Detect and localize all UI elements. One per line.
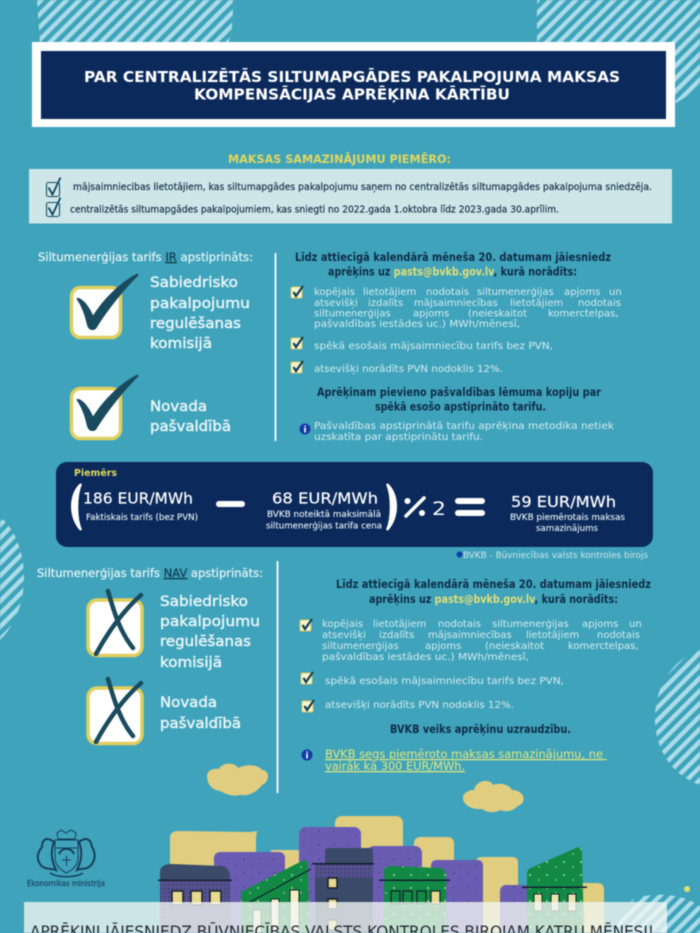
decorative dot [684,886,690,892]
divisor: 2 [432,498,446,520]
panel: bottom banner [24,902,667,933]
icon: check [46,178,60,196]
title banner [32,42,675,127]
bullet: volume text: lietotājiem [373,619,426,630]
icon: small check [300,619,312,631]
label: Sabiedrisko pakalpojumu regulēšanas komisijā: Sabiedrisko [150,275,238,291]
title: PAR CENTRALIZĒTĀS SILTUMAPGĀDES PAKALPOJUMA MAKSAS [84,66,620,86]
label: Sabiedrisko pakalpojumu regulēšanas komisijā: Sabiedrisko [160,594,248,610]
label: Sabiedrisko pakalpojumu regulēšanas komisijā: regulēšanas [160,634,251,650]
icon: info: i [305,752,309,762]
label: Sabiedrisko pakalpojumu regulēšanas komisijā: komisijā [160,655,222,671]
icon: small check [291,286,303,298]
example label: Piemērs [74,468,117,479]
icon: small check [302,700,314,712]
illustration: clouds [207,764,524,812]
divider [276,561,278,793]
icon: large check 2 [72,376,137,438]
label: Novada pašvaldībā: pašvaldībā [160,716,241,732]
caption: maximum price: siltumenerģijas tarifa cena [266,522,382,532]
icon: large cross 2 [88,679,142,744]
info text: uzskatīta par apstiprinātu tarifu. [314,432,483,443]
panel: example formula [56,462,653,547]
bullet: volume text: nodotais [438,619,481,630]
decorative striped circle: left [0,517,24,640]
bullet: VAT text: atsevišķi norādīts PVN nodoklis 12%. [325,699,514,711]
divider [274,253,276,441]
bullet: volume text: mājsaimniecības [414,298,498,309]
label: Sabiedrisko pakalpojumu regulēšanas komisijā: regulēšanas [150,316,241,332]
bullet: volume text: (neieskaitot [468,308,527,320]
division sign [404,498,425,516]
bullet: volume text: nodotais [597,630,640,641]
bullet: volume text: apjoms [413,308,449,320]
heading: maksas samazinājumu piemēro: MAKSAS SAMAZINĀJUMU PIEMĒRO: [228,152,451,166]
bullet: volume text: apjoms [564,287,600,298]
icon: small check [301,672,313,684]
bullet: volume text: atsevišķi [322,629,366,641]
logo: coat of arms [38,830,95,877]
label: Novada pašvaldībā: Novada [160,695,217,711]
icon: large cross 1 [88,591,142,656]
right bracket [387,484,396,530]
bullet: volume text: apjoms [425,641,461,652]
bullet: tariff text: spēkā esošais mājsaimniecību tarifs bez PVN, [325,675,564,687]
bullet: volume text: komerctelpas, [568,641,639,652]
bullet: volume text: izdalīts [379,630,414,641]
icon: small check [291,337,303,349]
instructions heading (approved tariff): Līdz attiecīgā kalendārā mēneša 20. datumam jāiesniedz [295,250,611,264]
footnote: BVKB: BVKB - Būvniecības valsts kontroles birojs [463,551,648,561]
label: Sabiedrisko pakalpojumu regulēšanas komisijā: pakalpojumu [160,614,260,630]
bullet: volume text: izdalīts [368,298,403,309]
note: attach decision copy: spēkā esošo apstiprināto tarifu. [375,400,546,414]
highlighted note: limit: vairāk kā 300 EUR/MWh. [325,759,465,773]
caption: applied reduction: BVKB piemērotais maksas [510,513,626,523]
value: actual tariff: 186 EUR/MWh [83,490,193,508]
icon: info [300,424,310,436]
illustration: city buildings [158,816,604,933]
bullet: volume text: kopējais [314,287,355,298]
section heading: tarifs NAV apstiprināts: Siltumenerģijas tarifs NAV apstiprināts: [37,566,263,580]
decorative striped circle: bottom right [612,895,700,933]
bullet: volume text: (neieskaitot [485,641,544,652]
label: Sabiedrisko pakalpojumu regulēšanas komisijā: pakalpojumu [150,296,250,312]
icon: check [46,198,60,216]
instructions heading (no approved tariff): Līdz attiecīgā kalendārā mēneša 20. datumam jāiesniedz [336,577,651,591]
logo caption: Ekonomikas ministrija [27,879,105,888]
bullet: volume text: lietotājiem [510,298,563,309]
bullet: volume text: siltumenerģijas [314,308,391,320]
minus sign [216,501,245,507]
decorative striped circle: top right [537,0,700,103]
bullet: volume text: pašvaldības iestādes uc.) MWh/mēnesī, [322,651,529,663]
bullet: volume text: nodotais [426,287,469,298]
caption: actual tariff: Faktiskais tarifs (bez PVN) [86,513,198,523]
decorative striped circle: top left [37,0,233,44]
caption: applied reduction: samazinājums [536,524,599,534]
bullet: volume text: lietotājiem [363,287,416,298]
icon: info [302,750,312,762]
info text: Pašvaldības apstiprinātā tarifu aprēķina metodika netiek [314,420,614,432]
bullet: volume text: pašvaldības iestādes uc.) MWh/mēnesī, [314,318,520,330]
value: maximum price: 68 EUR/MWh [272,490,378,508]
value: applied reduction: 59 EUR/MWh [511,493,616,511]
bullet: volume text: siltumenerģijas [322,641,399,652]
bullet: volume text: komerctelpas, [548,308,619,320]
equals sign [455,498,485,516]
bullet: volume text: un [629,619,642,630]
note: supervision: BVKB veiks aprēķinu uzraudzību. [390,722,571,736]
bullet: volume text: nodotais [578,298,621,309]
icon: small check [291,361,303,373]
title: KOMPENSĀCIJAS APRĒĶINA KĀRTĪBU [194,84,510,104]
highlighted note: limit: BVKB segs piemēroto maksas samazinājumu, ne [325,747,603,761]
bullet: volume text: atsevišķi [314,297,358,309]
panel: applicability [29,169,672,224]
applicability text 2: centralizētās siltumapgādes pakalpojumiem, kas sniegti no 2022.gada 1.oktobra līdz 2023.gada 30.aprīlim. [70,204,559,216]
bullet: VAT text: atsevišķi norādīts PVN nodoklis 12%. [314,363,503,375]
label: Novada pašvaldībā: Novada [150,399,207,415]
instructions heading (approved tariff): aprēķins uz pasts@bvkb.gov.lv, kurā norādīts: [328,264,594,278]
bullet: volume text: siltumenerģijas [492,619,569,630]
bullet: volume text: lietotājiem [526,630,579,641]
bullet: volume text: siltumenerģijas [477,287,554,298]
bullet: volume text: kopējais [322,619,363,630]
instructions heading (no approved tariff): aprēķins uz pasts@bvkb.gov.lv, kurā norādīts: [369,592,635,606]
applicability text 1: mājsaimniecibas lietotājiem, kas siltumapgādes pakalpojumu saņem no centralizētās siltumapgādes pakalpojuma sniedzēja. [73,182,652,193]
decorative striped circle: right [655,650,700,785]
label: Novada pašvaldībā: pašvaldībā [150,419,231,435]
label: Sabiedrisko pakalpojumu regulēšanas komisijā: komisijā [150,336,212,352]
bullet: volume text: apjoms [582,619,618,630]
note: attach decision copy: Aprēķinam pievieno pašvaldības lēmuma kopiju par [317,385,601,399]
caption: maximum price: BVKB noteiktā maksimālā [267,510,381,520]
section heading: tarifs IR apstiprināts: Siltumenerģijas tarifs IR apstiprināts: [38,250,253,264]
bullet: volume text: un [609,287,622,298]
bullet: tariff text: spēkā esošais mājsaimniecību tarifs bez PVN, [314,340,553,352]
left bracket [72,484,81,530]
icon: info: i [303,426,307,436]
bullet: volume text: mājsaimniecības [428,630,512,641]
icon: large check 1 [72,275,137,338]
